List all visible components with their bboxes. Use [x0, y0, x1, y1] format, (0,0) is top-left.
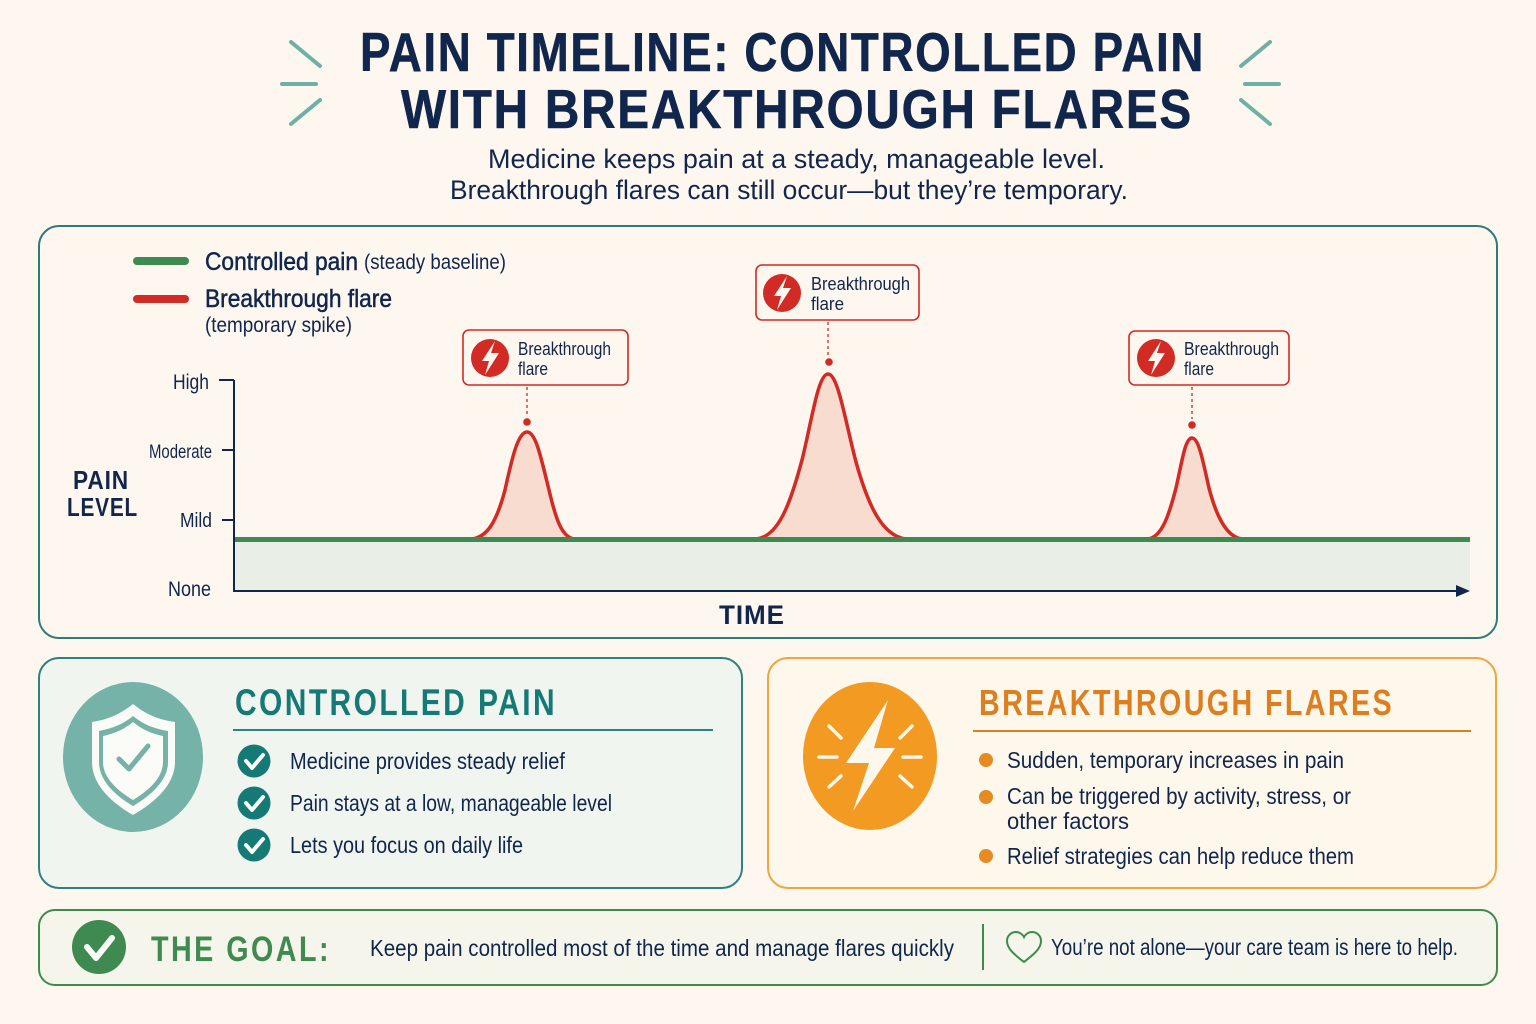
title: PAIN TIMELINE: CONTROLLED PAIN	[360, 21, 1205, 83]
support text: You’re not alone—your care team is here to help.	[1051, 934, 1458, 960]
panel: the goal	[39, 910, 1497, 985]
callout: flare 1: flare	[518, 359, 548, 379]
y axis ticks and labels: None	[168, 578, 211, 601]
heading: CONTROLLED PAIN	[235, 682, 557, 723]
title	[360, 21, 1205, 140]
bullet list	[979, 747, 1354, 869]
legend: Controlled pain	[205, 248, 358, 276]
legend: (steady baseline)	[364, 251, 506, 274]
time label: TIME	[719, 600, 785, 630]
heading: BREAKTHROUGH FLARES	[979, 682, 1394, 723]
controlled pain baseline	[235, 537, 1470, 542]
callout: flare 1: Breakthrough	[518, 339, 611, 359]
y axis ticks and labels: Moderate	[149, 442, 212, 463]
icon: right title accent rays	[1241, 42, 1279, 124]
icon: shield with check	[63, 682, 203, 832]
callout: flare 3	[1129, 331, 1289, 429]
icon: lightning bolt	[803, 682, 937, 830]
icon: heart	[1007, 932, 1041, 962]
subtitle	[450, 144, 1128, 205]
bullet list: other factors	[1007, 808, 1129, 834]
y axis label: LEVEL	[67, 492, 138, 522]
legend	[133, 248, 506, 337]
callout: flare 2: flare	[811, 294, 844, 314]
y axis label: PAIN	[73, 465, 129, 495]
bullet list: Can be triggered by activity, stress, or	[1007, 783, 1351, 809]
check list	[238, 744, 612, 862]
icon: goal check	[72, 920, 126, 974]
bullet list: Relief strategies can help reduce them	[1007, 843, 1354, 869]
y axis label	[67, 465, 138, 522]
callout: flare 3: Breakthrough	[1184, 339, 1279, 359]
icon: left title accent rays	[282, 42, 320, 124]
flare curve 1	[472, 432, 574, 539]
panel: breakthrough flares	[768, 658, 1496, 888]
subtitle: Medicine keeps pain at a steady, manageable level.	[488, 144, 1105, 174]
y axis ticks and labels: High	[173, 371, 209, 394]
callout: flare 3: flare	[1184, 359, 1214, 379]
panel: pain timeline chart	[39, 226, 1497, 638]
callout: flare 1	[463, 330, 628, 426]
legend: (temporary spike)	[205, 314, 352, 337]
legend: Breakthrough flare	[205, 285, 392, 313]
check list: Pain stays at a low, manageable level	[290, 790, 612, 816]
title: WITH BREAKTHROUGH FLARES	[401, 78, 1193, 140]
y axis ticks and labels	[149, 371, 234, 601]
baseline band	[235, 541, 1470, 590]
callout: flare 2: Breakthrough	[811, 274, 910, 294]
flare curve 3	[1148, 438, 1242, 539]
goal heading: THE GOAL:	[151, 930, 331, 969]
panel: controlled pain	[39, 658, 742, 888]
subtitle: Breakthrough flares can still occur—but they’re temporary.	[450, 175, 1128, 205]
axes	[234, 380, 1470, 597]
goal text: Keep pain controlled most of the time and manage flares quickly	[370, 935, 954, 961]
bullet list: Sudden, temporary increases in pain	[1007, 747, 1344, 773]
check list: Lets you focus on daily life	[290, 832, 523, 858]
check list: Medicine provides steady relief	[290, 748, 566, 774]
flare curve 2	[756, 374, 906, 539]
y axis ticks and labels: Mild	[180, 510, 212, 532]
callout: flare 2	[756, 265, 919, 366]
